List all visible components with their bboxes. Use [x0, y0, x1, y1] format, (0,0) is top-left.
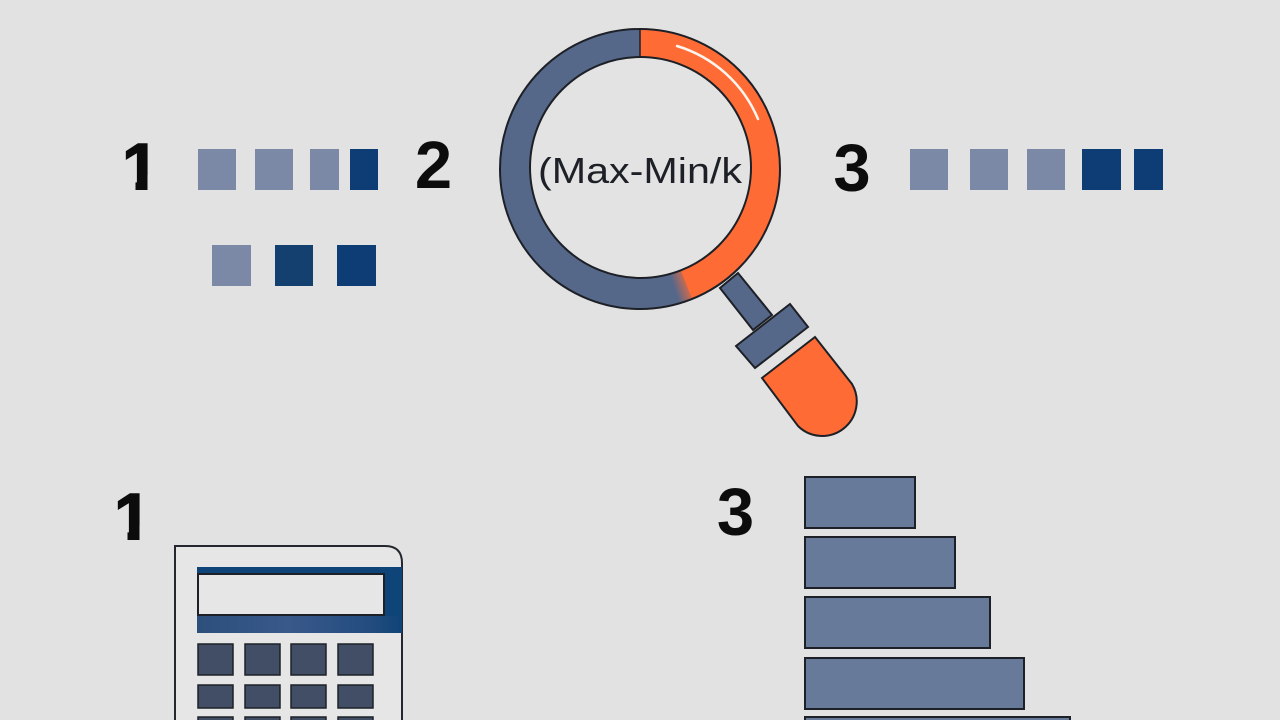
lens ring	[500, 29, 780, 309]
number 1 bottom: 1	[114, 480, 151, 555]
infographic canvas	[118, 28, 1163, 720]
calculator display frame	[197, 567, 402, 633]
number 1 top: 1	[122, 130, 159, 205]
formula text: (Max-Min/k	[538, 150, 743, 191]
calculator display	[198, 574, 384, 615]
icon: magnifying glass	[500, 29, 857, 436]
calculator body	[175, 546, 402, 720]
ring blend	[640, 169, 692, 304]
number 3 bottom: 3	[717, 475, 754, 550]
outer ring outline	[500, 29, 780, 309]
number 3 top: 3	[833, 131, 871, 206]
orange ring arc	[640, 29, 780, 299]
icon: calculator	[175, 546, 402, 720]
calculator keys	[198, 644, 373, 720]
histogram bars	[805, 477, 1070, 720]
number 2: 2	[415, 128, 452, 203]
seam at ring top	[639, 29, 641, 57]
magnifier neck	[720, 273, 772, 330]
ring highlight	[677, 46, 758, 119]
lens inner	[530, 57, 751, 278]
magnifier orange handle	[762, 337, 857, 436]
magnifier collar	[736, 304, 808, 368]
squares group 1	[198, 149, 378, 286]
squares group 3	[910, 149, 1163, 190]
calculator display bottom band	[197, 616, 402, 633]
